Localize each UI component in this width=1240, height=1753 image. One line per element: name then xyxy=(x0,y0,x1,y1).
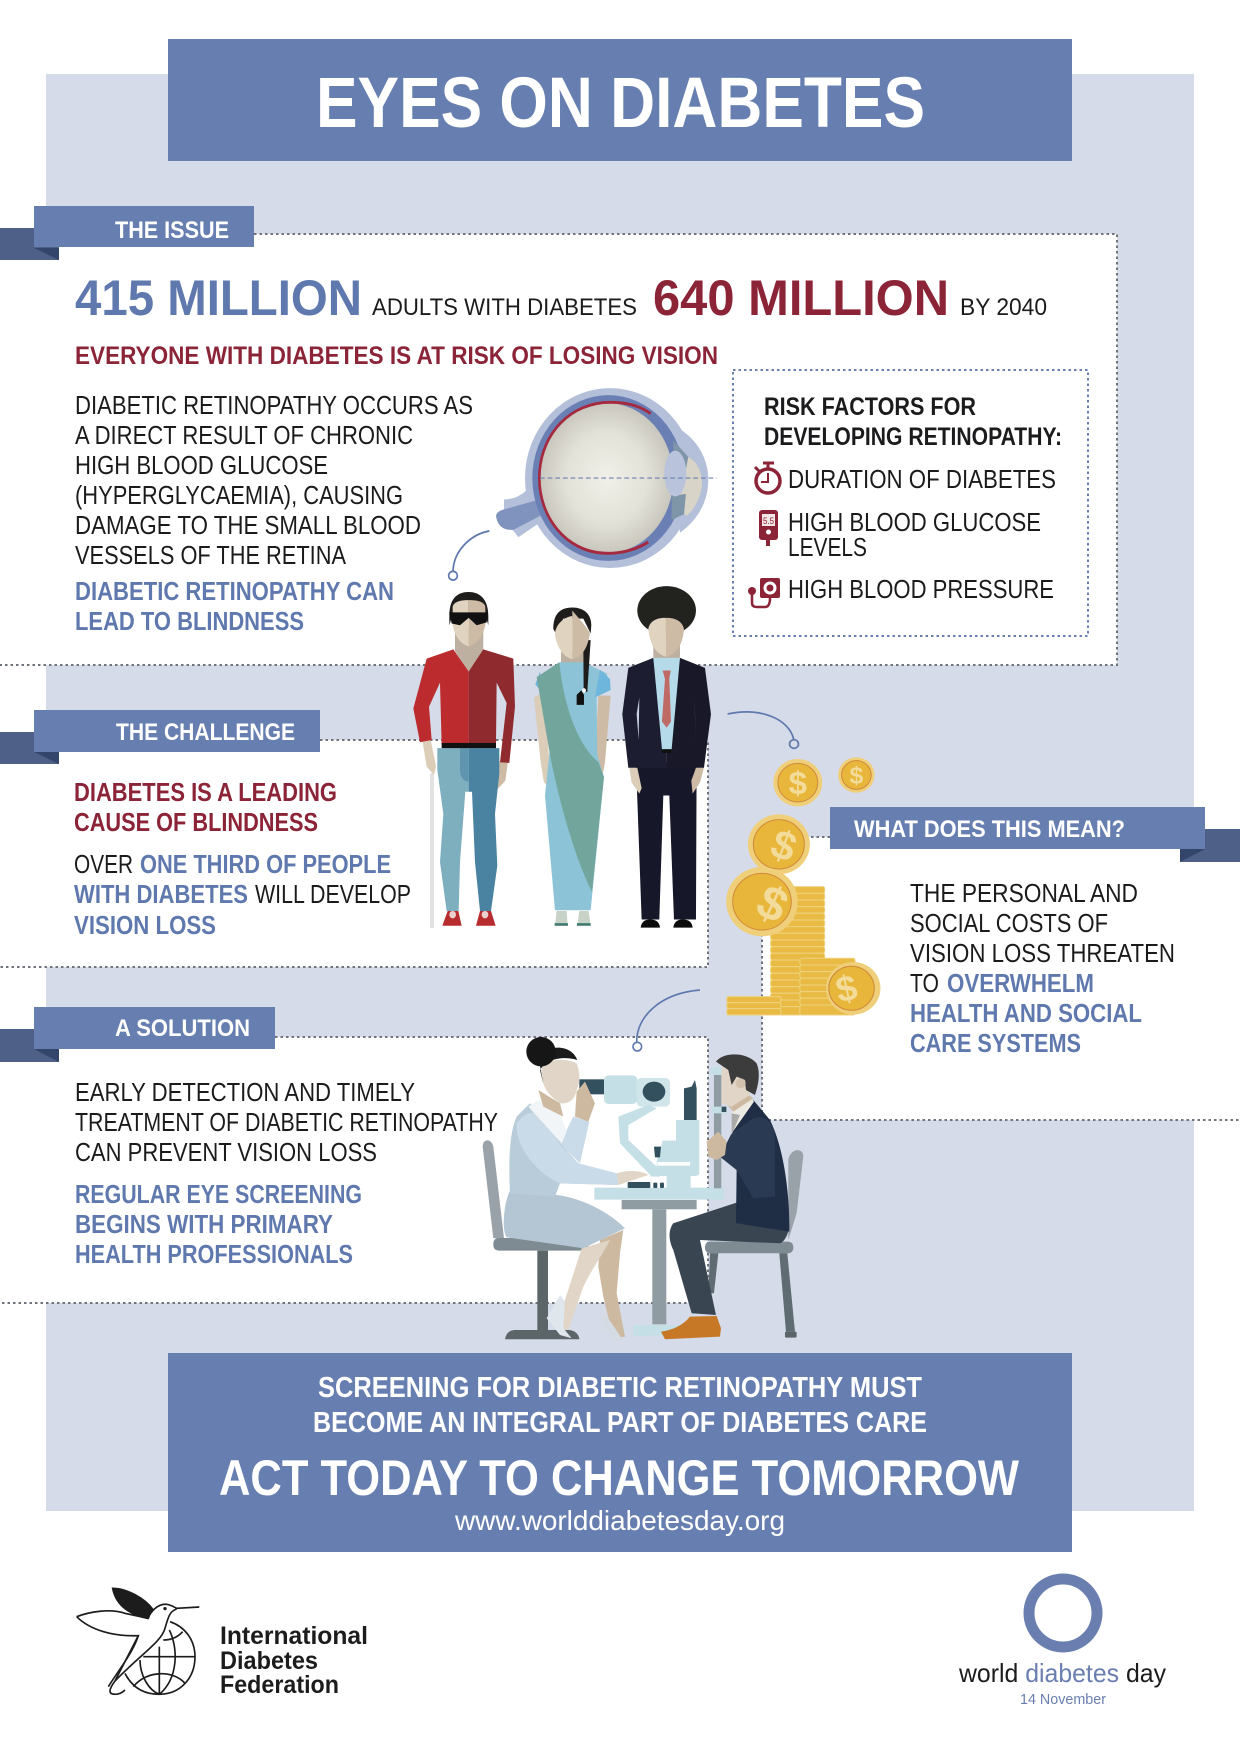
risk: high blood pressure: HIGH BLOOD PRESSURE xyxy=(788,576,1054,604)
body text: diabetic retinopathy: (HYPERGLYCAEMIA), CAUSING xyxy=(75,482,403,510)
body text: one third of people: ONE THIRD OF PEOPLE xyxy=(140,851,391,879)
website: www.worlddiabetesday.org xyxy=(454,1505,785,1536)
illustration: man in suit xyxy=(622,586,711,928)
blue text: regular eye screening: BEGINS WITH PRIMARY xyxy=(75,1211,333,1239)
body text: early detection: CAN PREVENT VISION LOSS xyxy=(75,1139,377,1167)
body text: one third of people xyxy=(74,851,411,940)
icon: blue circle xyxy=(1029,1579,1097,1647)
heading ribbon: the issue: THE ISSUE xyxy=(115,217,229,244)
risk: high blood glucose levels: LEVELS xyxy=(788,534,867,562)
body text: diabetic retinopathy: VESSELS OF THE RETINA xyxy=(75,542,346,570)
risk: duration of diabetes: DURATION OF DIABETES xyxy=(788,466,1056,494)
heading ribbon: the challenge xyxy=(0,710,320,764)
panel: the challenge xyxy=(0,710,708,967)
illustration: eye cross-section xyxy=(496,388,717,568)
statistic: 415 million adults with diabetes xyxy=(75,270,637,326)
screening statement: SCREENING FOR DIABETIC RETINOPATHY MUST xyxy=(318,1372,922,1404)
statistic: 640 million by 2040: BY 2040 xyxy=(960,294,1047,321)
icon: hummingbird and globe xyxy=(77,1588,199,1694)
screening statement: BECOME AN INTEGRAL PART OF DIABETES CARE xyxy=(313,1407,927,1439)
blue callout text: LEAD TO BLINDNESS xyxy=(75,608,304,636)
logo wordmark: world diabetes day xyxy=(958,1658,1166,1688)
red statement xyxy=(74,779,337,837)
statistic: 640 million by 2040: 640 MILLION xyxy=(653,270,949,326)
patient chair xyxy=(705,1150,803,1338)
icon: glucose meter: 5.5 xyxy=(763,516,774,526)
slit lamp machine xyxy=(579,1067,730,1188)
body text: personal and social costs: VISION LOSS THREATEN xyxy=(910,940,1175,968)
risk: high blood glucose levels xyxy=(788,509,1041,562)
icon: glucose meter xyxy=(759,510,778,546)
panel: a solution xyxy=(0,1007,708,1303)
federation name: Federation xyxy=(220,1671,339,1699)
bottom call to action banner xyxy=(168,1353,1072,1552)
illustration: eye screening consultation xyxy=(483,1037,803,1341)
panel: risk factors xyxy=(733,370,1088,636)
body text: early detection xyxy=(75,1079,498,1167)
title banner xyxy=(168,39,1072,161)
coin xyxy=(748,814,810,874)
body text: one third of people: OVER xyxy=(74,851,133,879)
blue text: regular eye screening: REGULAR EYE SCREENING xyxy=(75,1181,362,1209)
body text: personal and social costs: THE PERSONAL AND xyxy=(910,880,1138,908)
statistic: 415 million adults with diabetes: 415 MILLION xyxy=(75,270,362,326)
body text: early detection: TREATMENT OF DIABETIC RETINOPATHY xyxy=(75,1109,498,1137)
icon: stopwatch xyxy=(755,463,780,493)
blue callout text: DIABETIC RETINOPATHY CAN xyxy=(75,578,394,606)
body text: one third of people: WILL DEVELOP xyxy=(255,881,411,909)
body text: personal and social costs: OVERWHELM xyxy=(947,970,1094,998)
body text: diabetic retinopathy: DAMAGE TO THE SMALL BLOOD xyxy=(75,512,421,540)
heading ribbon: what does this mean xyxy=(830,807,1240,862)
panel: the issue xyxy=(0,206,1117,665)
body text: diabetic retinopathy: A DIRECT RESULT OF CHRONIC xyxy=(75,422,413,450)
logo: international diabetes federation xyxy=(77,1588,368,1699)
blue text: regular eye screening xyxy=(75,1181,362,1269)
body text: early detection: EARLY DETECTION AND TIMELY xyxy=(75,1079,415,1107)
red subheading: EVERYONE WITH DIABETES IS AT RISK OF LOSING VISION xyxy=(75,342,718,370)
risk: high blood glucose levels: HIGH BLOOD GLUCOSE xyxy=(788,509,1041,537)
date: 14 November xyxy=(1020,1691,1106,1708)
heading ribbon: what does this mean: WHAT DOES THIS MEAN? xyxy=(854,816,1125,843)
coin stacks xyxy=(727,887,855,1015)
title banner: EYES ON DIABETES xyxy=(316,64,925,143)
table xyxy=(594,1188,724,1336)
heading ribbon: the challenge: THE CHALLENGE xyxy=(116,719,295,746)
red statement: DIABETES IS A LEADING xyxy=(74,779,337,807)
coin: $ xyxy=(765,821,803,871)
body text: one third of people: WITH DIABETES xyxy=(74,881,248,909)
body text: personal and social costs: TO xyxy=(910,970,939,998)
coin: $ xyxy=(832,967,861,1010)
body text: one third of people: VISION LOSS xyxy=(74,912,216,940)
coin xyxy=(726,867,798,936)
body text: diabetic retinopathy: HIGH BLOOD GLUCOSE xyxy=(75,452,328,480)
risk factors heading: DEVELOPING RETINOPATHY: xyxy=(764,423,1062,451)
arrow: eye to person xyxy=(449,531,489,580)
illustration: man with cane and sunglasses xyxy=(413,592,515,928)
background panel xyxy=(46,74,1194,1511)
federation name: Diabetes xyxy=(220,1647,318,1675)
patient figure xyxy=(661,1054,789,1339)
illustration: coins xyxy=(726,757,880,1015)
coin: $ xyxy=(789,765,807,801)
doctor chair xyxy=(483,1140,588,1339)
coin xyxy=(773,759,822,806)
logo: world diabetes day xyxy=(958,1579,1166,1708)
coin: $ xyxy=(849,763,864,789)
coin xyxy=(826,962,880,1015)
coin: $ xyxy=(748,874,796,934)
body text: personal and social costs: HEALTH AND SOCIAL xyxy=(910,1000,1142,1028)
illustration: woman in sari xyxy=(534,608,611,926)
coin xyxy=(838,757,875,793)
body text: personal and social costs: CARE SYSTEMS xyxy=(910,1030,1081,1058)
body text: personal and social costs xyxy=(910,880,1175,1058)
screening statement xyxy=(313,1372,927,1439)
heading ribbon: a solution xyxy=(0,1007,275,1062)
body text: diabetic retinopathy: DIABETIC RETINOPATHY OCCURS AS xyxy=(75,392,473,420)
federation name xyxy=(220,1622,368,1699)
panel: what does this mean xyxy=(762,807,1240,1120)
federation name: International xyxy=(220,1622,368,1650)
heading ribbon: the issue xyxy=(0,206,254,260)
blue callout text xyxy=(75,578,394,636)
act today slogan: ACT TODAY TO CHANGE TOMORROW xyxy=(219,1450,1020,1506)
statistic: 415 million adults with diabetes: ADULTS WITH DIABETES xyxy=(372,294,637,321)
arrow: coins to screening xyxy=(633,990,700,1051)
body text: diabetic retinopathy xyxy=(75,392,473,570)
heading ribbon: a solution: A SOLUTION xyxy=(115,1015,250,1042)
red statement: CAUSE OF BLINDNESS xyxy=(74,809,318,837)
icon: blood pressure cuff xyxy=(748,578,780,607)
doctor figure xyxy=(504,1037,648,1341)
body text: personal and social costs: SOCIAL COSTS OF xyxy=(910,910,1108,938)
risk factors heading: RISK FACTORS FOR xyxy=(764,393,976,421)
risk factors heading xyxy=(764,393,1062,451)
arrow: people to coins xyxy=(728,712,798,748)
blue text: regular eye screening: HEALTH PROFESSIONALS xyxy=(75,1241,353,1269)
